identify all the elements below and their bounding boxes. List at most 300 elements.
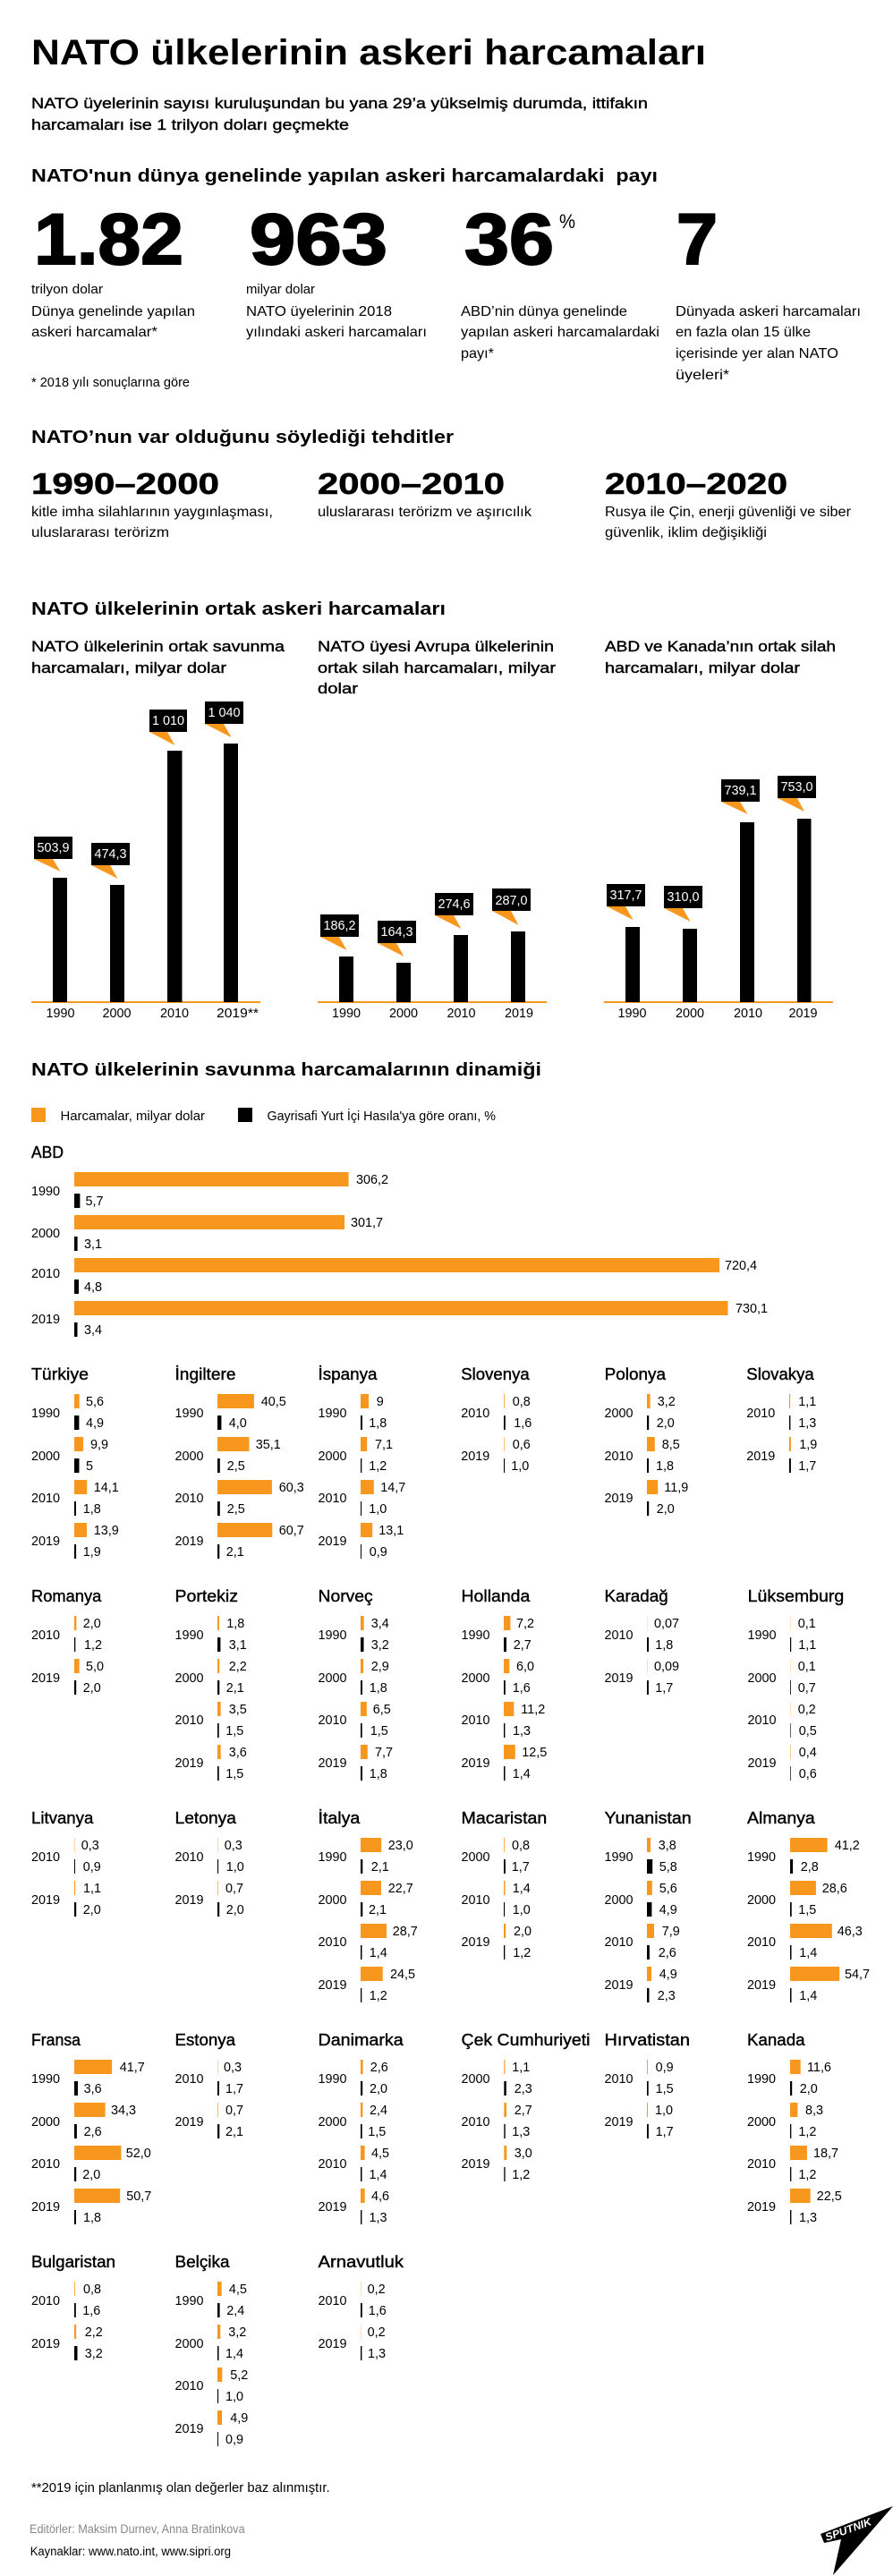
row 2019: 2,0 xyxy=(514,1925,532,1939)
row 2019: 2019 xyxy=(319,1756,347,1771)
row 1990 xyxy=(175,1616,247,1653)
threat period 1990-2000 xyxy=(31,467,273,540)
row 2010: 0,3 xyxy=(225,1839,242,1853)
heading: share of world spending: NATO'nun dünya genelinde yapılan askeri harcamalardaki payı xyxy=(31,166,658,186)
row 2000: 2,6 xyxy=(84,2125,102,2139)
row 2000: 3,2 xyxy=(658,1395,676,1409)
bar 2010: 2010 xyxy=(160,1007,189,1021)
row 2010: 52,0 xyxy=(126,2147,151,2161)
row 2010: 2010 xyxy=(319,1713,347,1728)
row 2010: 2010 xyxy=(319,2294,347,2308)
row 1990: 1990 xyxy=(175,2294,204,2308)
row 1990: 1990 xyxy=(319,1407,347,1421)
threat period 2000-2010: uluslararası terörizm ve aşırıcılık xyxy=(318,505,532,520)
row 1990: 1,1 xyxy=(798,1638,816,1653)
bar 2000 xyxy=(378,921,418,1021)
country: Belçika: Belçika xyxy=(175,2253,231,2271)
row 2019: 2019 xyxy=(319,1535,347,1549)
row 2019 xyxy=(175,2103,243,2139)
row 2019: 2019 xyxy=(175,1893,204,1908)
country: Polonya: Polonya xyxy=(605,1365,667,1383)
row 2000: 2,5 xyxy=(227,1459,245,1474)
row 2010 xyxy=(748,1702,817,1739)
row 2000: 2,1 xyxy=(226,1681,244,1696)
country: Romanya xyxy=(31,1587,104,1696)
row 2010: 1,8 xyxy=(655,1638,673,1653)
country: Karadağ xyxy=(605,1587,679,1696)
country: Slovenya xyxy=(461,1365,532,1474)
row 2010: 2,6 xyxy=(659,1946,676,1960)
chart title: harcamaları, milyar dolar xyxy=(31,659,226,676)
row 2019: 2019 xyxy=(31,1535,60,1549)
row 1990: 23,0 xyxy=(388,1839,413,1853)
row 2019: 13,1 xyxy=(378,1524,404,1538)
row 2010: 2,0 xyxy=(83,1617,101,1631)
row 2019: 2,0 xyxy=(226,1903,244,1917)
row 2019: 1,2 xyxy=(513,1946,531,1960)
bar 1990: 1990 xyxy=(617,1007,647,1021)
row 2019: 1,4 xyxy=(799,1989,817,2003)
country: Danimarka: Danimarka xyxy=(319,2031,404,2049)
chart title: NATO üyesi Avrupa ülkelerinin xyxy=(318,638,554,655)
row 2010 xyxy=(461,1394,532,1431)
row 2010: 18,7 xyxy=(813,2147,838,2161)
stat: 963 billion: milyar dolar xyxy=(246,283,315,297)
row 2010: 2010 xyxy=(462,1713,490,1728)
chart title: dolar xyxy=(318,680,358,697)
threat period 2010-2020 xyxy=(605,467,852,540)
row 2010: 2,5 xyxy=(227,1502,245,1517)
row 1990 xyxy=(31,1394,104,1431)
bar 2000 xyxy=(664,886,704,1021)
row 2010: 2010 xyxy=(175,1713,204,1728)
row 2000: 34,3 xyxy=(111,2104,136,2118)
row 2010: 1,2 xyxy=(84,1638,102,1653)
bar 2000: 310,0 xyxy=(667,890,700,905)
row 2000: 5 xyxy=(86,1459,93,1474)
stat: 1.82 trillion xyxy=(31,200,195,340)
row 2019: 12,5 xyxy=(522,1746,547,1760)
row 2010: 2010 xyxy=(747,1935,776,1950)
row 2010 xyxy=(175,2060,243,2096)
bar 2000: 2000 xyxy=(389,1007,418,1021)
row 2000: 2000 xyxy=(462,2072,490,2087)
row 2000: 2000 xyxy=(319,1671,347,1686)
bar 2000: 164,3 xyxy=(380,925,413,939)
row 2019: 2019 xyxy=(31,1313,60,1327)
row 2019: 2019 xyxy=(31,2200,60,2215)
country: İngiltere: İngiltere xyxy=(175,1365,236,1383)
row 2010: 1,7 xyxy=(225,2082,243,2096)
logo: Sputnik xyxy=(821,2506,893,2575)
row 1990: 2,4 xyxy=(226,2304,244,2318)
bar 2019: 753,0 xyxy=(780,780,813,795)
row 1990 xyxy=(319,1838,413,1875)
row 2019: 0,6 xyxy=(799,1767,817,1781)
threat period 2000-2010: 2000–2010 xyxy=(318,467,505,500)
row 2010 xyxy=(175,1838,244,1875)
row 2019 xyxy=(175,1745,247,1781)
row 2000: 9,9 xyxy=(90,1438,108,1452)
bar 2000: 2000 xyxy=(676,1007,704,1021)
row 2019 xyxy=(747,2189,842,2225)
row 1990: 5,8 xyxy=(659,1860,677,1875)
row 2000 xyxy=(747,1881,847,1917)
row 2019: 3,0 xyxy=(515,2147,532,2161)
row 2019 xyxy=(747,1967,870,2003)
row 1990 xyxy=(462,1616,534,1653)
row 2000: 1,1 xyxy=(512,2061,530,2075)
row 2000 xyxy=(747,2103,823,2139)
row 1990: 1990 xyxy=(747,1850,776,1865)
row 2019: 2019 xyxy=(461,1450,489,1464)
row 2019 xyxy=(748,1745,817,1781)
row 2019: 1,7 xyxy=(798,1459,816,1474)
country: Lüksemburg xyxy=(748,1587,844,1781)
row 1990: 41,7 xyxy=(120,2061,145,2075)
row 2000 xyxy=(319,2103,387,2139)
row 1990 xyxy=(31,2060,145,2096)
stat: 36 percent: 36 xyxy=(464,200,554,280)
row 2019: 2019 xyxy=(462,1756,490,1771)
row 2010: 720,4 xyxy=(725,1259,757,1273)
row 1990: 3,4 xyxy=(371,1617,389,1631)
threat period 2000-2010 xyxy=(318,467,532,520)
row 1990 xyxy=(319,1616,389,1653)
row 1990: 1990 xyxy=(462,1628,490,1643)
row 2010: 1,6 xyxy=(514,1416,532,1431)
row 2019: 2,0 xyxy=(657,1502,675,1517)
country: Bulgaristan: Bulgaristan xyxy=(31,2253,115,2271)
stat: 1.82 trillion: Dünya genelinde yapılan xyxy=(31,304,195,319)
row 1990: 2,0 xyxy=(800,2082,818,2096)
row 2019 xyxy=(31,1659,104,1696)
subtitle xyxy=(31,95,648,133)
row 2010 xyxy=(747,1924,863,1960)
country: Slovakya xyxy=(746,1365,817,1474)
row 2010 xyxy=(462,2103,532,2139)
chart title xyxy=(318,638,556,697)
row 2010: 14,1 xyxy=(94,1481,119,1495)
row 2000: 2000 xyxy=(748,1671,777,1686)
row 2000: 0,8 xyxy=(512,1839,530,1853)
row 2000: 2000 xyxy=(462,1671,490,1686)
row 2000: 2000 xyxy=(605,1407,634,1421)
row 2019: 2019 xyxy=(319,2337,347,2351)
row 2019: 2019 xyxy=(605,2115,634,2130)
row 1990: 1990 xyxy=(175,1407,204,1421)
row 2019: 3,6 xyxy=(229,1746,247,1760)
row 2010: 1,4 xyxy=(369,2168,387,2182)
country: Almanya xyxy=(747,1809,870,2003)
row 2019: 4,9 xyxy=(230,2411,248,2426)
bar 2000: 474,3 xyxy=(94,847,127,862)
logo: Sputnik: SPUTNIK xyxy=(823,2515,874,2544)
row 2019: 0,09 xyxy=(654,1660,679,1674)
row 1990 xyxy=(748,1616,816,1653)
row 2000: 2000 xyxy=(31,1450,60,1464)
country: İspanya: İspanya xyxy=(319,1365,378,1383)
stat: 963 billion xyxy=(246,200,427,340)
row 2019: 1,0 xyxy=(655,2104,673,2118)
row 2019 xyxy=(31,1523,119,1560)
row 2010 xyxy=(175,1702,247,1739)
bar 2010: 2010 xyxy=(734,1007,762,1021)
stat: 36 percent xyxy=(461,200,659,361)
row 2010: 1,6 xyxy=(82,2304,100,2318)
row 2000 xyxy=(319,1437,393,1474)
row 2010 xyxy=(31,1616,102,1653)
row 2019: 0,9 xyxy=(370,1545,387,1560)
row 2010: 60,3 xyxy=(279,1481,304,1495)
row 2010: 2010 xyxy=(175,2072,204,2087)
row 2019: 2019 xyxy=(747,1978,776,1993)
row 2010: 2010 xyxy=(605,1450,634,1464)
chart title: ortak silah harcamaları, milyar xyxy=(318,659,556,676)
subtitle: NATO üyelerinin sayısı kuruluşundan bu yana 29’a yükselmiş durumda, ittifakın xyxy=(31,95,648,112)
row 1990 xyxy=(605,1838,677,1875)
row 2000: 2000 xyxy=(605,1893,634,1908)
country: Hollanda xyxy=(462,1587,547,1781)
row 2010: 0,2 xyxy=(368,2283,386,2297)
bar 2019 xyxy=(492,888,533,1021)
bar 2010: 739,1 xyxy=(724,784,757,798)
threat period 2010-2020: 2010–2020 xyxy=(605,467,787,500)
row 2019: 5,0 xyxy=(86,1660,104,1674)
row 1990: 3,6 xyxy=(84,2082,102,2096)
row 2010: 2010 xyxy=(31,1850,60,1865)
row 2010: 2010 xyxy=(462,1893,490,1908)
country: Portekiz: Portekiz xyxy=(175,1587,238,1605)
row 1990 xyxy=(747,2060,831,2096)
row 2010: 1,5 xyxy=(225,1724,243,1739)
row 2000: 2,3 xyxy=(515,2082,532,2096)
row 2019 xyxy=(605,2103,674,2139)
heading: joint spending: NATO ülkelerinin ortak askeri harcamaları xyxy=(31,599,446,619)
bar 1990: 503,9 xyxy=(37,841,70,855)
row 2010: 2,7 xyxy=(515,2104,532,2118)
row 2019 xyxy=(319,2189,389,2225)
row 2010: 1,4 xyxy=(513,1882,531,1896)
row 2019: 2019 xyxy=(175,2115,204,2130)
country: Portekiz xyxy=(175,1587,247,1781)
row 2019: 2019 xyxy=(31,1671,60,1686)
row 2019 xyxy=(175,2410,248,2447)
country: Slovakya: Slovakya xyxy=(746,1365,815,1383)
bar 1990: 1990 xyxy=(332,1007,361,1021)
country: Norveç xyxy=(319,1587,393,1781)
row 2019: 1,8 xyxy=(83,2211,101,2225)
row 2019: 11,9 xyxy=(664,1481,688,1495)
country: Norveç: Norveç xyxy=(319,1587,373,1605)
row 2010: 0,3 xyxy=(81,1839,99,1853)
bar 2019 xyxy=(205,701,259,1021)
row 1990: 3,1 xyxy=(229,1638,247,1653)
country: ABD xyxy=(31,1143,768,1338)
row 2000: 2,0 xyxy=(657,1416,675,1431)
row 2010 xyxy=(319,1480,405,1517)
row 1990: 2,6 xyxy=(370,2061,388,2075)
row 2019: 0,4 xyxy=(799,1746,817,1760)
row 2000 xyxy=(748,1659,816,1696)
country: Türkiye xyxy=(31,1365,119,1560)
row 2010: 1,0 xyxy=(513,1903,531,1917)
country: Letonya: Letonya xyxy=(175,1809,237,1827)
row 2000: 2000 xyxy=(31,2115,60,2130)
bar 2000: 2000 xyxy=(102,1007,132,1021)
row 2010: 0,8 xyxy=(83,2283,101,2297)
chart: USA and Canada xyxy=(604,638,836,1021)
row 2019 xyxy=(605,1480,688,1517)
bar 2019: 287,0 xyxy=(495,894,528,908)
row 2000: 4,9 xyxy=(659,1903,677,1917)
country: Fransa: Fransa xyxy=(31,2031,81,2049)
stat: 36 percent: % xyxy=(559,210,575,233)
row 2010: 2,0 xyxy=(82,2168,100,2182)
row 2010: 8,5 xyxy=(662,1438,680,1452)
row 2010: 2010 xyxy=(175,2379,204,2393)
row 2019: 1,3 xyxy=(369,2211,387,2225)
row 2010: 1,0 xyxy=(369,1502,387,1517)
country: Çek Cumhuriyeti: Çek Cumhuriyeti xyxy=(462,2031,591,2049)
bar 2019: 2019 xyxy=(788,1007,818,1021)
row 1990 xyxy=(175,2282,247,2318)
stat: 7 members: Dünyada askeri harcamaları xyxy=(676,304,861,319)
row 2000: 1,5 xyxy=(798,1903,816,1917)
row 2019: 2019 xyxy=(746,1450,775,1464)
country: Karadağ: Karadağ xyxy=(605,1587,668,1605)
row 2010: 1,4 xyxy=(370,1946,387,1960)
row 2019: 4,6 xyxy=(371,2189,389,2204)
row 2010 xyxy=(605,1437,680,1474)
row 2010: 1,8 xyxy=(656,1459,674,1474)
row 1990: 40,5 xyxy=(261,1395,286,1409)
row 2010: 0,9 xyxy=(83,1860,101,1875)
row 2019: 0,7 xyxy=(225,2104,243,2118)
row 2000 xyxy=(31,1437,108,1474)
row 1990: 1990 xyxy=(31,1185,60,1199)
stat: 1.82 trillion: 1.82 xyxy=(34,200,183,280)
row 2000: 2,2 xyxy=(229,1660,247,1674)
row 1990 xyxy=(319,2060,388,2096)
stat: 36 percent: yapılan askeri harcamalardaki xyxy=(461,325,659,340)
country: Danimarka xyxy=(319,2031,404,2225)
row 2019: 2019 xyxy=(462,2157,490,2172)
country: Bulgaristan xyxy=(31,2253,115,2361)
stat: 36 percent: payı* xyxy=(461,346,494,361)
row 1990 xyxy=(175,1394,286,1431)
country: Macaristan xyxy=(462,1809,547,1960)
row 2010 xyxy=(175,2368,248,2404)
stat: 963 billion: NATO üyelerinin 2018 xyxy=(246,304,392,319)
row 2010: 3,5 xyxy=(229,1703,247,1717)
country: Arnavutluk xyxy=(319,2253,404,2361)
country: Estonya: Estonya xyxy=(175,2031,236,2049)
row 2000 xyxy=(605,1394,676,1431)
row 2010 xyxy=(319,1702,391,1739)
bar 1990: 317,7 xyxy=(609,888,642,903)
stat: 963 billion: yılındaki askeri harcamaları xyxy=(246,325,427,340)
stat: 7 members xyxy=(676,200,861,383)
stat: 36 percent: ABD’nin dünya genelinde xyxy=(461,304,627,319)
row 1990: 1990 xyxy=(319,1628,347,1643)
row 2010 xyxy=(31,1258,757,1295)
row 2019 xyxy=(319,2325,386,2361)
row 2010: 28,7 xyxy=(393,1925,418,1939)
row 2000: 0,7 xyxy=(798,1681,816,1696)
row 2019: 3,4 xyxy=(84,1323,102,1338)
subtitle: harcamaları ise 1 trilyon doları geçmekte xyxy=(31,116,349,133)
row 2010 xyxy=(462,1702,545,1739)
row 1990: 1990 xyxy=(31,1407,60,1421)
row 2019 xyxy=(31,2189,151,2225)
row 2000 xyxy=(462,1659,534,1696)
row 2019: 60,7 xyxy=(279,1524,304,1538)
row 2019 xyxy=(461,1437,531,1474)
row 2010: 2010 xyxy=(319,1935,347,1950)
row 2010 xyxy=(175,1480,304,1517)
row 2010: 46,3 xyxy=(838,1925,863,1939)
row 2010 xyxy=(31,1838,101,1875)
stat: 1.82 trillion: trilyon dolar xyxy=(31,283,103,297)
row 2000: 2000 xyxy=(175,2337,204,2351)
row 2019 xyxy=(462,1745,547,1781)
row 1990: 3,8 xyxy=(659,1839,676,1853)
country: Letonya xyxy=(175,1809,244,1917)
row 2019 xyxy=(319,1523,404,1560)
row 2010 xyxy=(747,2146,838,2182)
row 2000: 1,4 xyxy=(225,2347,243,2361)
row 2010 xyxy=(605,1924,680,1960)
row 1990: 1,8 xyxy=(369,1416,387,1431)
row 2010: 2010 xyxy=(31,2157,60,2172)
row 2000: 3,1 xyxy=(84,1237,102,1252)
bar 2010 xyxy=(721,779,762,1021)
row 2019: 2,0 xyxy=(83,1903,101,1917)
row 2010: 2010 xyxy=(31,1267,60,1281)
country: Yunanistan: Yunanistan xyxy=(605,1809,692,1827)
row 2019: 2019 xyxy=(462,1935,490,1950)
row 2019: 1,1 xyxy=(83,1882,101,1896)
row 1990: 1,8 xyxy=(226,1617,244,1631)
row 2019: 3,2 xyxy=(85,2347,103,2361)
row 2010: 2010 xyxy=(319,1492,347,1506)
chart: European members xyxy=(318,638,556,1021)
row 1990: 4,5 xyxy=(229,2283,247,2297)
row 2010: 1,8 xyxy=(83,1502,101,1517)
row 2019: 22,5 xyxy=(817,2189,842,2204)
row 2019 xyxy=(319,1745,393,1781)
chart title xyxy=(31,638,285,676)
row 2010: 2010 xyxy=(31,1628,60,1643)
row 1990: 7,2 xyxy=(516,1617,534,1631)
row 1990: 2,0 xyxy=(370,2082,387,2096)
row 2019: 1,7 xyxy=(655,1681,673,1696)
bar 2019 xyxy=(778,776,818,1021)
row 2019: 0,9 xyxy=(225,2433,243,2447)
row 2010: 1,5 xyxy=(370,1724,388,1739)
row 2000: 1,7 xyxy=(512,1860,530,1875)
country: İngiltere xyxy=(175,1365,304,1560)
title: NATO ülkelerinin askeri harcamaları xyxy=(31,33,706,72)
heading: spending dynamics: NATO ülkelerinin savunma harcamalarının dinamiği xyxy=(31,1060,541,1080)
row 2000: 2000 xyxy=(319,1893,347,1908)
country: Slovenya: Slovenya xyxy=(461,1365,531,1383)
row 2019: 1,2 xyxy=(370,1989,387,2003)
row 1990: 1990 xyxy=(319,1850,347,1865)
row 2010: 2010 xyxy=(175,1492,204,1506)
row 1990: 1990 xyxy=(747,2072,776,2087)
